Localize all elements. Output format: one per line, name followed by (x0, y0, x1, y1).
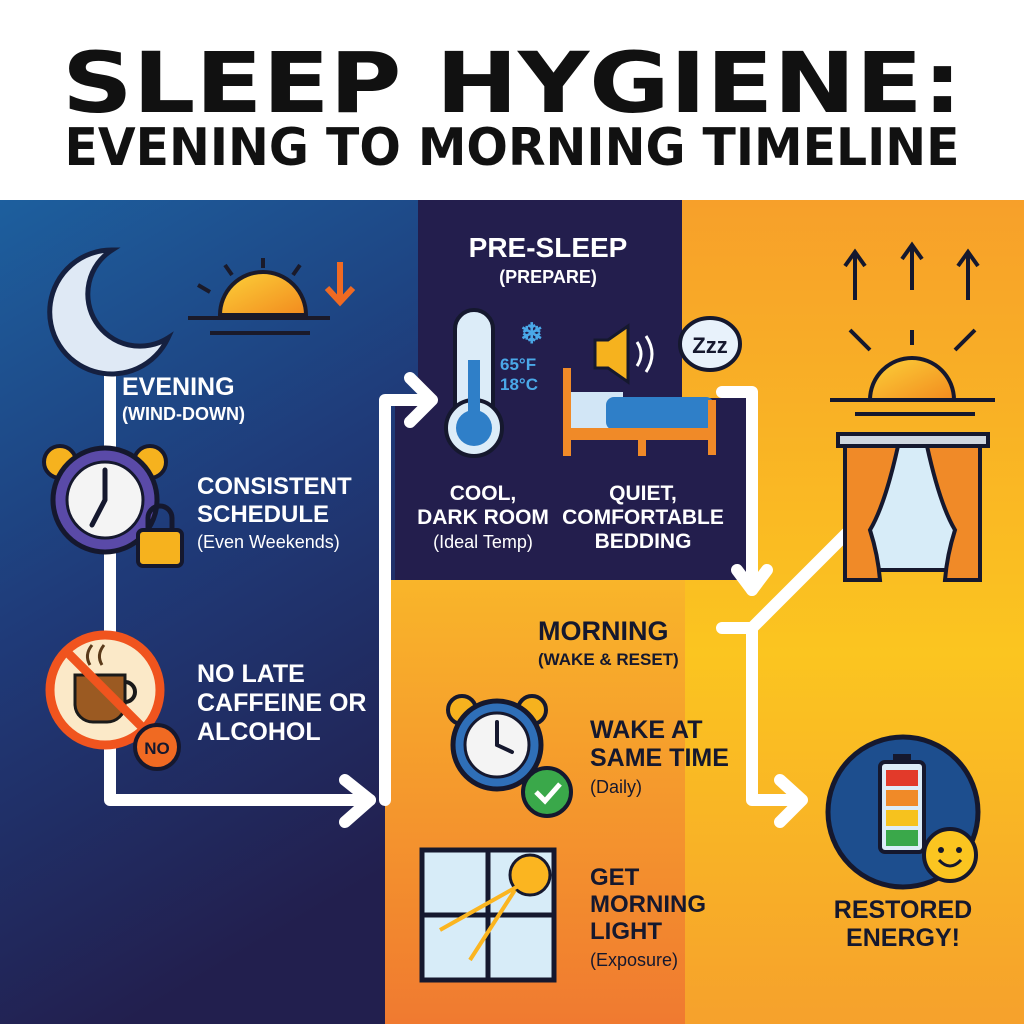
text: quiet bedding: BEDDING (595, 530, 691, 553)
text: no late caffeine: CAFFEINE OR (197, 689, 366, 717)
panel: evening background (0, 200, 420, 1024)
text: wake at same time: SAME TIME (590, 744, 729, 772)
icon: thermometer: 65°F (500, 355, 536, 374)
text: no late caffeine: ALCOHOL (197, 718, 321, 746)
icon: alarm clock with check (448, 696, 571, 816)
text: pre-sleep heading (469, 232, 627, 287)
text: quiet bedding: QUIET, (609, 482, 677, 505)
text: evening (122, 373, 245, 424)
text: consistent schedule: SCHEDULE (197, 501, 329, 528)
text: morning light: LIGHT (590, 918, 662, 945)
icon: sunset (188, 258, 353, 333)
text: quiet bedding: COMFORTABLE (562, 506, 724, 529)
icon: no caffeine (50, 635, 179, 769)
text: pre-sleep heading: PRE-SLEEP (469, 232, 627, 263)
text: restored energy: ENERGY! (846, 924, 960, 952)
title: SLEEP HYGIENE: (62, 34, 962, 132)
arrow: timeline path (110, 360, 870, 822)
text: evening: (WIND-DOWN) (122, 404, 245, 424)
text: wake at same time: WAKE AT (590, 716, 702, 744)
text: morning light: MORNING (590, 891, 706, 918)
text: cool dark room: COOL, (450, 482, 516, 505)
text: morning heading: (WAKE & RESET) (538, 650, 679, 669)
icon: bed with speaker and zzz: Zzz (692, 333, 728, 358)
icon: sunrise with curtains (830, 245, 995, 580)
icon: bed with speaker and zzz (563, 318, 740, 456)
title (62, 34, 962, 178)
icon: moon (50, 250, 168, 374)
text: morning light: (Exposure) (590, 950, 678, 970)
text: restored energy: RESTORED (834, 896, 972, 924)
icon: thermometer: 18°C (500, 375, 538, 394)
text: wake at same time (590, 716, 729, 797)
text: pre-sleep heading: (PREPARE) (499, 267, 597, 287)
panel: right morning background (682, 200, 1024, 1024)
text: consistent schedule: CONSISTENT (197, 473, 352, 500)
panel: pre-sleep (395, 200, 752, 580)
text: quiet bedding (562, 482, 724, 553)
text: restored energy (834, 896, 972, 952)
icon: no caffeine: NO (144, 739, 170, 758)
text: no late caffeine (197, 660, 366, 746)
icon: battery (828, 737, 978, 887)
text: no late caffeine: NO LATE (197, 660, 305, 688)
text: morning heading: MORNING (538, 616, 668, 646)
icon: alarm clock with lock (44, 446, 182, 566)
text: consistent schedule (197, 473, 352, 552)
text: morning light (590, 864, 706, 970)
text: cool dark room (417, 482, 549, 552)
text: morning heading (538, 616, 679, 669)
text: morning light: GET (590, 864, 640, 891)
icon: window with sun (422, 850, 554, 980)
text: evening: EVENING (122, 373, 235, 401)
title: EVENING TO MORNING TIMELINE (64, 118, 960, 178)
text: cool dark room: (Ideal Temp) (433, 532, 533, 552)
text: cool dark room: DARK ROOM (417, 506, 549, 529)
text: consistent schedule: (Even Weekends) (197, 532, 340, 552)
panel: bottom middle background (385, 580, 685, 1024)
icon: thermometer (446, 310, 543, 456)
icon: thermometer: ❄ (520, 318, 543, 349)
text: wake at same time: (Daily) (590, 777, 642, 797)
